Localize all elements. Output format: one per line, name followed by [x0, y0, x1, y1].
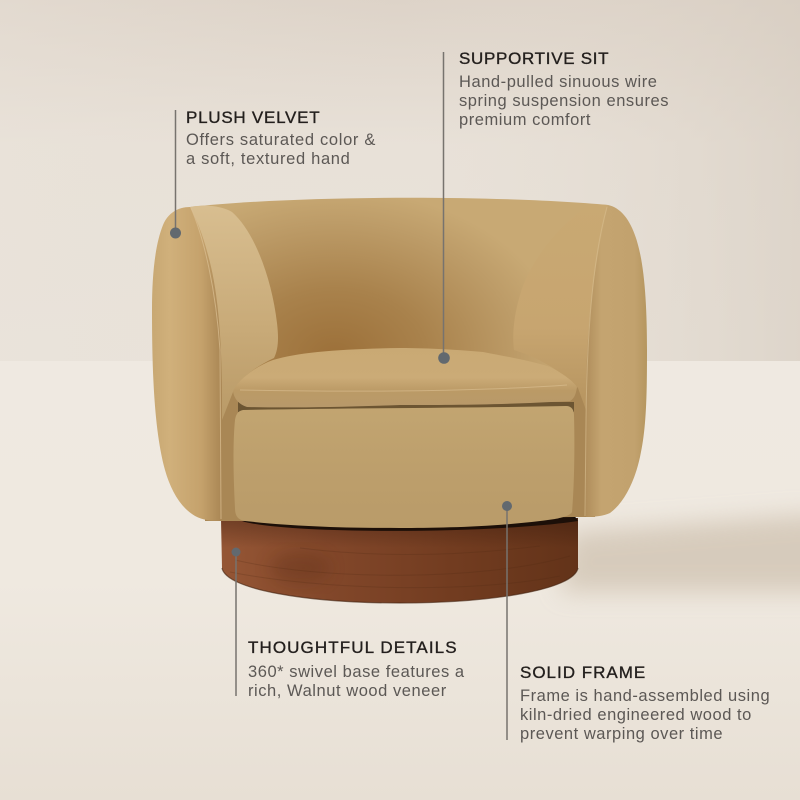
- callout line: thoughtful details: [232, 548, 240, 696]
- callout: plush velvet: [186, 108, 376, 168]
- callout: supportive sit: spring suspension ensures: [459, 92, 669, 110]
- callout: solid frame: kiln-dried engineered wood to: [520, 706, 752, 724]
- callout: plush velvet: Offers saturated color &: [186, 131, 376, 149]
- callout: supportive sit: SUPPORTIVE SIT: [459, 49, 609, 68]
- callout: thoughtful details: THOUGHTFUL DETAILS: [248, 638, 458, 657]
- left arm inner panel: [190, 206, 278, 420]
- right arm inner panel: [513, 205, 608, 410]
- background wall: [0, 0, 800, 362]
- callout: solid frame: Frame is hand-assembled using: [520, 687, 770, 705]
- arm front underlay: [205, 385, 595, 521]
- callout: supportive sit: [459, 49, 669, 129]
- callout: thoughtful details: [248, 638, 465, 700]
- dark gap under seat: [236, 515, 578, 531]
- callout: thoughtful details: 360* swivel base features a: [248, 663, 465, 681]
- callout: plush velvet: a soft, textured hand: [186, 150, 351, 168]
- seat cushion: [233, 348, 577, 407]
- callout: supportive sit: premium comfort: [459, 111, 591, 129]
- right arm outer: [586, 205, 647, 517]
- left arm outer: [152, 207, 222, 521]
- callout: solid frame: SOLID FRAME: [520, 663, 646, 682]
- callout line: plush velvet: [170, 110, 181, 238]
- left arm seam: [191, 208, 221, 519]
- walnut base: [221, 518, 578, 603]
- callout: supportive sit: Hand-pulled sinuous wire: [459, 73, 657, 91]
- seat front panel: [234, 406, 574, 528]
- chair back: [190, 198, 608, 410]
- callout: solid frame: [520, 663, 770, 743]
- callout line: solid frame: [502, 501, 512, 740]
- callout: thoughtful details: rich, Walnut wood veneer: [248, 682, 447, 700]
- callout: solid frame: prevent warping over time: [520, 725, 723, 743]
- cushion seam: [240, 385, 567, 391]
- floor shadow: [560, 515, 800, 592]
- callout: plush velvet: PLUSH VELVET: [186, 108, 320, 127]
- callout line: supportive sit: [438, 52, 450, 364]
- floor: [0, 361, 800, 800]
- gap behind seat: [238, 402, 574, 412]
- right arm seam: [585, 207, 607, 516]
